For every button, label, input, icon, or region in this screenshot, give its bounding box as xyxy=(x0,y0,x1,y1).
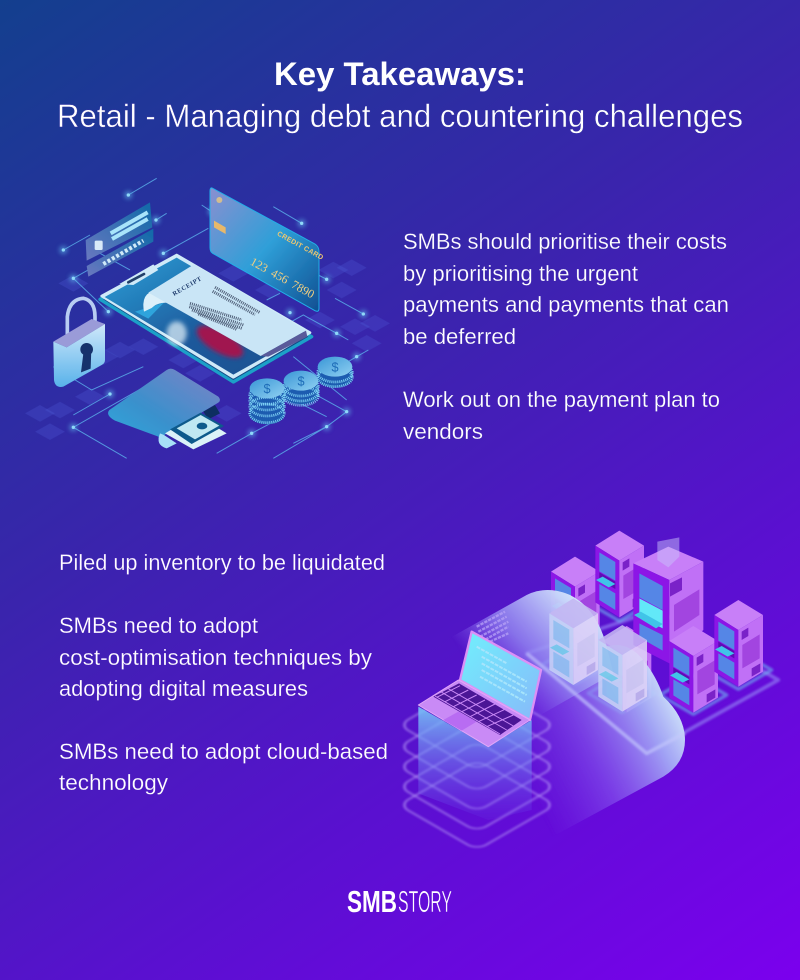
illustration: mobile payment xyxy=(25,178,390,458)
text block: inventory and digital measures xyxy=(59,550,388,795)
icon: wallet with cash xyxy=(108,369,227,449)
text block: inventory and digital measures: SMBs need to adopt cloud-based xyxy=(59,739,388,764)
text block: cost prioritisation: payments and payments that can xyxy=(403,292,729,317)
title: Key Takeaways: xyxy=(274,56,526,92)
text block: cost prioritisation: Work out on the payment plan to xyxy=(403,387,720,412)
text block: cost prioritisation: be deferred xyxy=(403,324,516,349)
text block: cost prioritisation: SMBs should prioritise their costs xyxy=(403,229,727,254)
icon: coin stacks: $ xyxy=(331,360,339,374)
icon: credit card xyxy=(210,188,324,311)
logo: STORY xyxy=(398,884,452,919)
pale servers inside cloud xyxy=(549,598,647,712)
icon: coin stacks: $ xyxy=(263,382,271,396)
light column xyxy=(418,707,532,820)
server racks xyxy=(551,531,763,713)
circuit lines xyxy=(53,178,368,458)
icon: smartphone with receipt xyxy=(100,255,312,382)
cloud xyxy=(403,590,685,850)
icon: login panel xyxy=(86,202,153,277)
stacked rings xyxy=(399,680,555,850)
cloud inner platform edge xyxy=(527,653,685,753)
text block: inventory and digital measures: cost-optimisation techniques by xyxy=(59,645,372,670)
icon: credit card: CREDIT CARD xyxy=(276,231,324,262)
icon: coin stacks xyxy=(250,357,352,424)
receipt label: RECEIPT xyxy=(171,275,203,298)
illustration: cloud computing xyxy=(399,531,778,850)
platform xyxy=(527,582,778,753)
text block: inventory and digital measures: Piled up inventory to be liquidated xyxy=(59,550,385,575)
title: Retail - Managing debt and countering challenges xyxy=(57,98,743,134)
cloud top highlight xyxy=(413,590,613,727)
title xyxy=(57,56,743,134)
circuit nodes xyxy=(59,191,367,437)
text block: cost prioritisation: vendors xyxy=(403,419,483,444)
icon: credit card: 123 456 7890 xyxy=(248,254,317,301)
icon: padlock xyxy=(53,298,105,387)
data lines above laptop xyxy=(477,612,508,642)
logo xyxy=(347,884,452,919)
logo: SMB xyxy=(347,884,397,919)
text block: inventory and digital measures: adopting digital measures xyxy=(59,676,308,701)
floor tiles xyxy=(25,259,390,440)
icon: coin stacks: $ xyxy=(297,374,305,388)
text block: cost prioritisation: by prioritising the urgent xyxy=(403,261,638,286)
icon: laptop xyxy=(418,632,541,747)
text block: cost prioritisation xyxy=(403,229,729,444)
text block: inventory and digital measures: SMBs need to adopt xyxy=(59,613,258,638)
text block: inventory and digital measures: technology xyxy=(59,770,168,795)
